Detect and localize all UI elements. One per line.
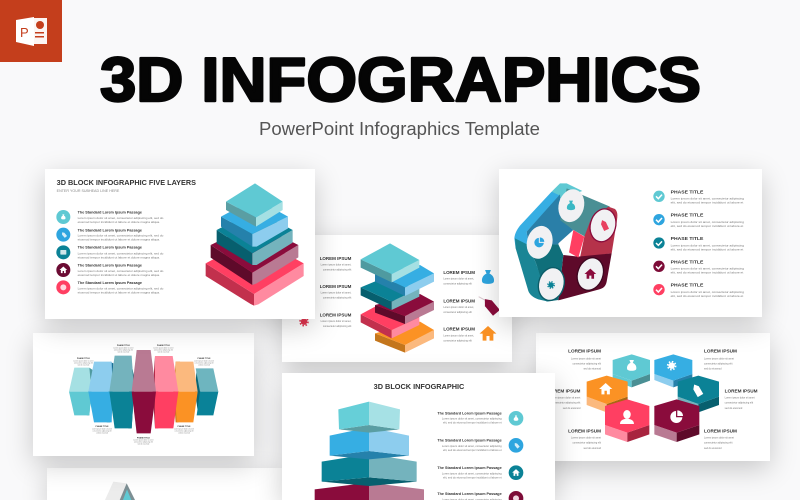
list item 1 — [437, 411, 523, 426]
list item 1 — [56, 210, 164, 224]
label: phase bottom 2: PHASE TITLE — [137, 436, 150, 439]
phase row 2: elit, sed do eiusmod tempor incididunt ut labore et — [671, 224, 744, 228]
label: top left: sed do eiusmod — [583, 368, 602, 371]
phase row 1: elit, sed do eiusmod tempor incididunt ut labore et — [671, 201, 744, 205]
label: phase bottom 2 — [133, 436, 154, 446]
chart: seven 3D columns — [69, 350, 218, 433]
label: phase bottom 3: consectetur adipiscing elit — [175, 429, 194, 432]
label: phase top 1: consectetur adipiscing elit — [74, 361, 93, 364]
label: phase bottom 3: sed do eiusmod — [178, 432, 190, 434]
phase row 5 — [653, 283, 744, 298]
list item 4: The Standard Lorem Ipsum Passage — [78, 263, 142, 267]
list item 2 — [56, 228, 164, 242]
list item 2: Lorem ipsum dolor sit amet, consectetur adipiscing elit, sed do — [78, 234, 164, 238]
list item 3: The Standard Lorem Ipsum Passage — [78, 246, 142, 250]
label: phase top 2: Lorem ipsum dolor sit amet — [113, 347, 134, 350]
phase row 5: elit, sed do eiusmod tempor incididunt ut labore et — [671, 294, 744, 298]
label: phase top 3: Lorem ipsum dolor sit amet — [153, 347, 174, 350]
phase row 4: Lorem ipsum dolor sit amet, consectetur adipiscing — [671, 267, 744, 271]
heading: 3D BLOCK INFOGRAPHIC — [374, 382, 465, 391]
list item 3: The Standard Lorem Ipsum Passage — [437, 466, 502, 470]
label: middle right: consectetur adipiscing elit — [725, 402, 753, 405]
label: phase top 4 — [194, 357, 215, 366]
list item 1: The Standard Lorem Ipsum Passage — [78, 211, 142, 215]
label: left 1: consectetur adipiscing elit — [323, 269, 352, 272]
label: middle right — [725, 389, 758, 410]
icon: price tag with string — [479, 296, 500, 316]
list item 1: eiusmod tempor incididunt ut labore et dolore magna aliqua. — [78, 220, 160, 224]
label: middle right: Lorem ipsum dolor sit amet — [725, 397, 755, 400]
phase row 1: Lorem ipsum dolor sit amet, consectetur adipiscing — [671, 197, 744, 201]
label: phase top 1: sed do eiusmod — [77, 364, 89, 366]
label: right 2: LOREM IPSUM — [443, 298, 475, 303]
list item 1: The Standard Lorem Ipsum Passage — [437, 412, 502, 416]
list item 3: eiusmod tempor incididunt ut labore et dolore magna aliqua. — [78, 255, 160, 259]
label: top right: consectetur adipiscing elit — [704, 362, 733, 365]
label: left 1 — [320, 256, 352, 272]
chart: 3D block pyramid — [315, 402, 424, 500]
label: bottom left — [568, 428, 602, 450]
logo: PowerPoint badge — [0, 0, 62, 62]
phase row 1 — [653, 189, 744, 205]
label: middle right: LOREM IPSUM — [725, 389, 758, 394]
label: left 2: LOREM IPSUM — [320, 284, 352, 289]
label: right 1: LOREM IPSUM — [443, 270, 475, 275]
label: left 2: consectetur adipiscing elit — [323, 297, 352, 300]
label: right 3 — [443, 327, 475, 342]
list item 4: Lorem ipsum dolor sit amet, consectetur adipiscing elit, sed do — [78, 269, 164, 273]
chart: staggered 3D block stack — [361, 243, 434, 353]
phase row 1: PHASE TITLE — [671, 189, 704, 195]
phase row 4: PHASE TITLE — [671, 259, 704, 265]
list item 2: The Standard Lorem Ipsum Passage — [437, 439, 502, 443]
label: phase top 3: consectetur adipiscing elit — [154, 349, 173, 352]
panel: hexagon infographic — [536, 333, 770, 461]
icon: red gear — [300, 318, 308, 326]
label: top left — [568, 349, 602, 371]
icon: money bag — [627, 360, 636, 371]
label: right 2: consectetur adipiscing elit — [443, 311, 472, 314]
list item 1: Lorem ipsum dolor sit amet, consectetur adipiscing — [442, 417, 502, 421]
phase row 5: PHASE TITLE — [671, 283, 704, 289]
chart: 3D pentagon ring with icons — [514, 183, 620, 303]
label: middle right: sed do eiusmod — [725, 407, 743, 410]
list item 2 — [437, 438, 523, 453]
label: middle left: sed do eiusmod — [563, 407, 581, 410]
label: right 3: LOREM IPSUM — [443, 327, 475, 332]
phase row 3 — [653, 236, 744, 251]
label: right 1: consectetur adipiscing elit — [443, 283, 472, 286]
phase row 4 — [653, 259, 744, 275]
list item 5: Lorem ipsum dolor sit amet, consectetur adipiscing elit, sed do — [78, 287, 164, 291]
subheading: ENTER YOUR SUBHEAD LINE HERE — [57, 189, 120, 193]
list item 3: elit, sed do eiusmod tempor incididunt ut labore et — [443, 475, 502, 479]
icon: pie chart — [534, 237, 544, 247]
label: phase top 4: Lorem ipsum dolor sit amet — [194, 359, 215, 362]
label: bottom left: LOREM IPSUM — [568, 428, 601, 433]
label: bottom right: LOREM IPSUM — [704, 428, 737, 433]
panel: 3D block infographic — [282, 373, 555, 500]
label: middle left: LOREM IPSUM — [547, 389, 580, 394]
list item 4: The Standard Lorem Ipsum Passage — [437, 492, 502, 496]
label: top left: Lorem ipsum dolor sit amet — [571, 357, 601, 360]
icon: gear — [548, 282, 554, 288]
label: phase bottom 1: sed do eiusmod — [96, 432, 108, 434]
label: phase bottom 3: Lorem ipsum dolor sit amet — [174, 427, 195, 430]
label: bottom right — [704, 428, 737, 450]
phase row 2: Lorem ipsum dolor sit amet, consectetur adipiscing — [671, 220, 744, 224]
list item 3: Lorem ipsum dolor sit amet, consectetur adipiscing — [442, 471, 502, 475]
phase row 3: PHASE TITLE — [671, 236, 704, 242]
label: bottom right: consectetur adipiscing elit — [704, 442, 733, 445]
label: phase top 3 — [153, 344, 174, 354]
icon: money bag — [567, 201, 575, 210]
label: top left: LOREM IPSUM — [568, 349, 601, 354]
phase row 5: Lorem ipsum dolor sit amet, consectetur adipiscing — [671, 290, 744, 294]
list item 5 — [56, 280, 164, 295]
label: right 1: Lorem ipsum dolor sit amet, — [443, 278, 474, 281]
icon: house — [599, 383, 612, 394]
label: top right: Lorem ipsum dolor sit amet — [704, 357, 734, 360]
list item 3 — [56, 245, 164, 259]
list item 2: Lorem ipsum dolor sit amet, consectetur adipiscing — [442, 444, 502, 448]
label: phase top 4: sed do eiusmod — [198, 364, 210, 366]
heading: 3D BLOCK INFOGRAPHIC FIVE LAYERS — [57, 178, 196, 187]
logo: PowerPoint badge: P — [20, 25, 29, 40]
label: phase bottom 3: PHASE TITLE — [178, 425, 191, 428]
label: middle left: Lorem ipsum dolor sit amet — [550, 397, 581, 400]
icon: price tag — [600, 219, 609, 231]
label: phase top 1: Lorem ipsum dolor sit amet — [73, 359, 94, 362]
phase row 3: elit, sed do eiusmod tempor incididunt ut labore et — [671, 247, 744, 251]
label: middle left — [547, 389, 581, 410]
list item 1: Lorem ipsum dolor sit amet, consectetur adipiscing elit, sed do — [78, 216, 164, 220]
label: phase bottom 2: consectetur adipiscing elit — [134, 441, 153, 444]
chart: six 3D hexagons with icons — [587, 354, 719, 442]
icon: money bag — [482, 270, 494, 284]
phase row 3: Lorem ipsum dolor sit amet, consectetur adipiscing — [671, 243, 744, 247]
icon: gear — [668, 362, 676, 370]
label: top left: consectetur adipiscing elit — [573, 362, 601, 365]
label: left 3: consectetur adipiscing elit — [323, 325, 352, 328]
label: phase top 2: PHASE TITLE — [117, 344, 130, 347]
label: bottom right: Lorem ipsum dolor sit amet — [704, 437, 734, 440]
label: phase top 1 — [73, 357, 94, 366]
label: right 2 — [443, 298, 475, 314]
label: phase top 2: consectetur adipiscing elit — [114, 349, 133, 352]
phase row 2: PHASE TITLE — [671, 213, 704, 219]
panel: cropped triangle slide — [47, 468, 282, 500]
label: right 3: Lorem ipsum dolor sit amet, — [443, 334, 474, 337]
label: left 2 — [320, 284, 352, 300]
icon: price tag — [691, 383, 703, 397]
label: right 2: Lorem ipsum dolor sit amet, — [443, 306, 474, 309]
phase row 2 — [653, 213, 744, 228]
panel: column block infographic — [33, 333, 254, 456]
label: phase bottom 2: Lorem ipsum dolor sit amet — [133, 439, 154, 442]
label: phase bottom 3 — [174, 425, 195, 434]
label: phase top 2 — [113, 344, 134, 354]
list item 5: eiusmod tempor incididunt ut labore et dolore magna aliqua. — [78, 291, 160, 295]
label: phase top 1: PHASE TITLE — [77, 357, 90, 360]
icon: person — [620, 410, 634, 424]
label: phase bottom 1 — [92, 425, 113, 434]
list item 4 — [437, 491, 523, 500]
label: left 3: LOREM IPSUM — [320, 312, 352, 317]
phase row 4: elit, sed do eiusmod tempor incididunt ut labore et — [671, 271, 744, 275]
label: left 1: LOREM IPSUM — [320, 256, 352, 261]
icon: house — [584, 269, 596, 279]
label: left 1: Lorem ipsum dolor sit amet, — [321, 264, 352, 267]
label: phase bottom 2: sed do eiusmod — [137, 444, 149, 446]
list item 2: The Standard Lorem Ipsum Passage — [78, 228, 142, 232]
list item 2: elit, sed do eiusmod tempor incididunt ut labore et — [443, 448, 502, 452]
icon: triangle block — [105, 482, 137, 500]
label: right 1 — [443, 270, 475, 286]
label: phase bottom 1: PHASE TITLE — [96, 425, 109, 428]
panel: pentagon phases — [499, 169, 762, 317]
label: phase bottom 1: Lorem ipsum dolor sit amet — [92, 427, 113, 430]
label: bottom left: sed do eiusmod — [583, 447, 602, 450]
label: top right: LOREM IPSUM — [704, 349, 737, 354]
label: phase top 3: PHASE TITLE — [157, 344, 170, 347]
label: bottom left: consectetur adipiscing elit — [573, 442, 601, 445]
label: phase top 4: PHASE TITLE — [198, 357, 211, 360]
list item 5: The Standard Lorem Ipsum Passage — [78, 281, 142, 285]
label: top right — [704, 349, 737, 371]
label: left 2: Lorem ipsum dolor sit amet, — [321, 292, 352, 295]
subtitle: PowerPoint Infographics Template — [259, 119, 540, 139]
label: bottom right: sed do eiusmod — [704, 447, 722, 450]
list item 3: Lorem ipsum dolor sit amet, consectetur adipiscing elit, sed do — [78, 251, 164, 255]
label: left 3: Lorem ipsum dolor sit amet, — [321, 320, 352, 323]
label: left 3 — [320, 312, 352, 328]
list item 2: eiusmod tempor incididunt ut labore et dolore magna aliqua. — [78, 238, 160, 242]
label: phase top 2: sed do eiusmod — [117, 352, 129, 354]
list item 3 — [437, 465, 523, 480]
label: bottom left: Lorem ipsum dolor sit amet — [571, 437, 601, 440]
label: middle left: consectetur adipiscing elit — [552, 402, 581, 405]
panel: five layers pyramid — [45, 169, 315, 319]
label: top right: sed do eiusmod — [704, 368, 722, 371]
icon: house — [480, 326, 496, 341]
chart: five-layer 3D pyramid — [206, 183, 304, 306]
list item 1: elit, sed do eiusmod tempor incididunt ut labore et — [443, 421, 502, 425]
icon: pie chart — [670, 410, 683, 423]
label: phase top 3: sed do eiusmod — [157, 352, 169, 354]
label: phase bottom 1: consectetur adipiscing elit — [93, 429, 112, 432]
label: phase top 4: consectetur adipiscing elit — [195, 361, 214, 364]
label: right 3: consectetur adipiscing elit — [443, 339, 472, 342]
list item 4 — [56, 263, 164, 277]
panel: staggered stack infographic — [282, 235, 512, 362]
list item 4: eiusmod tempor incididunt ut labore et dolore magna aliqua. — [78, 273, 160, 277]
